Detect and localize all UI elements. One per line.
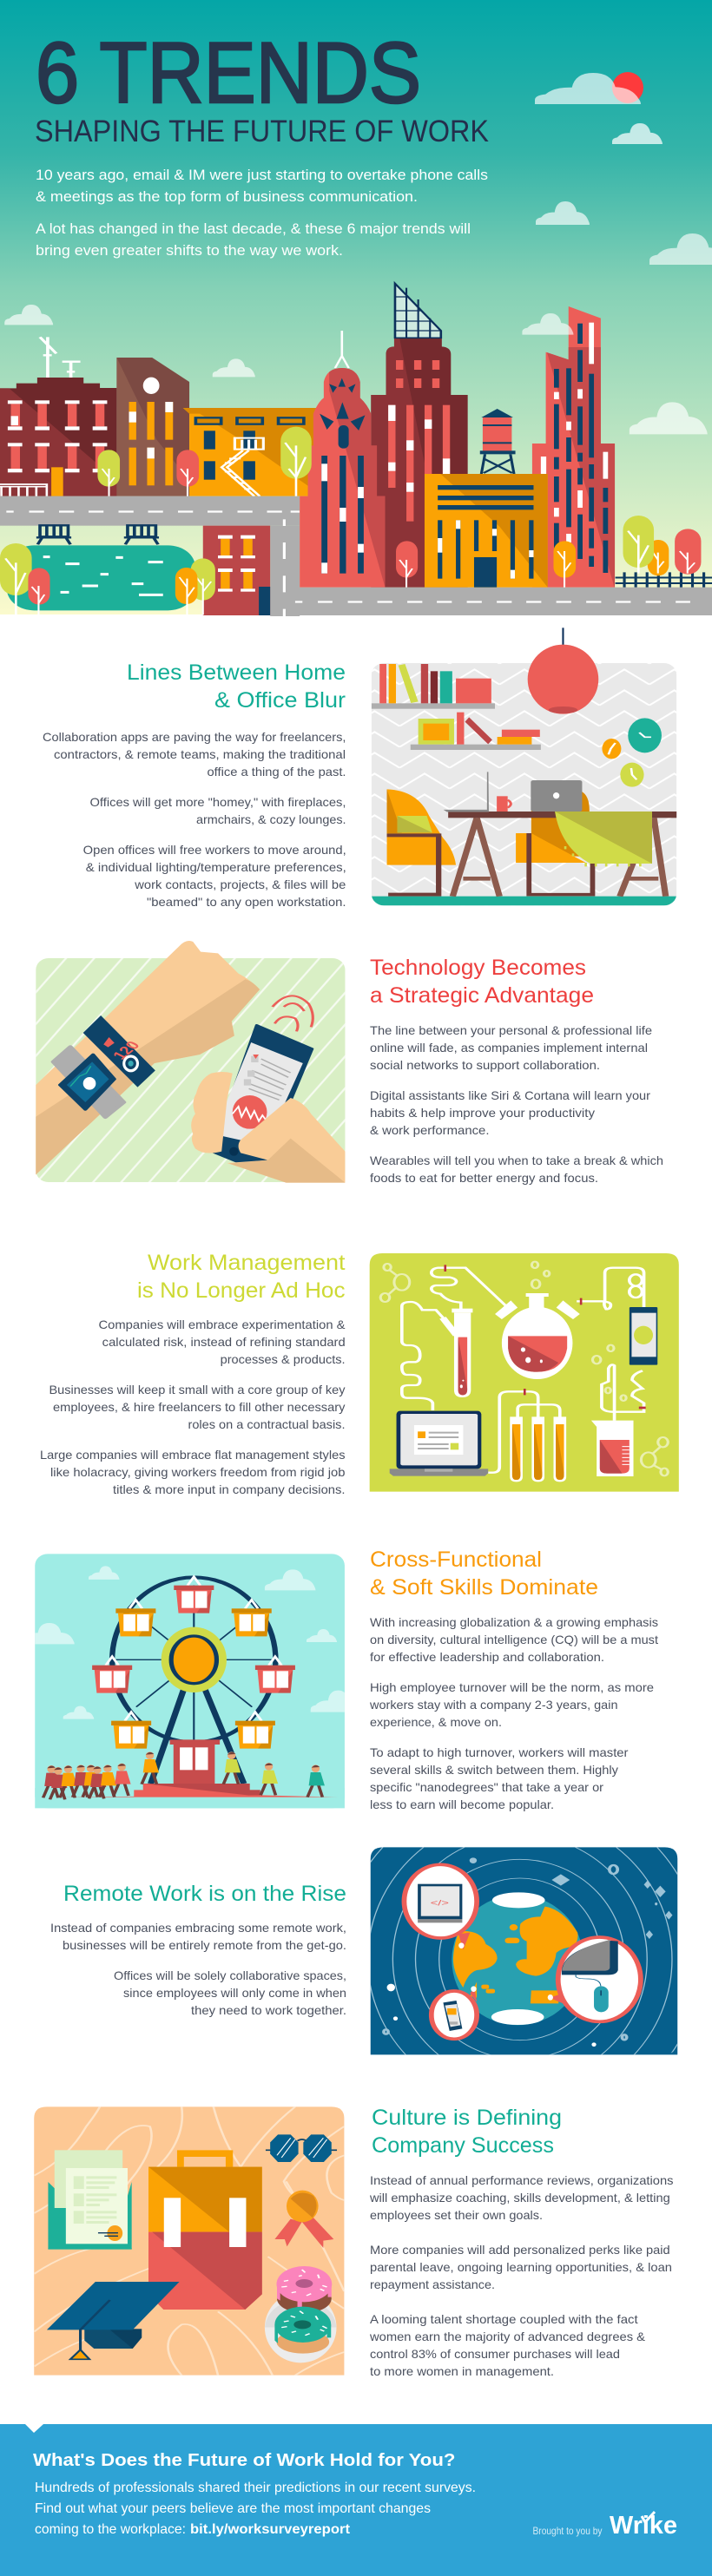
intro text: bring even greater shifts to the way we work. (36, 242, 343, 259)
backpack (177, 2150, 233, 2167)
text: lines between home and office: Collaboration apps are paving the way for freelancers, (43, 730, 346, 744)
heading: work management (137, 1251, 346, 1303)
title: 6 TRENDS (36, 24, 421, 121)
fence (616, 572, 712, 588)
footer text: coming to the workplace: (35, 2522, 186, 2537)
text: cross-functional: High employee turnover will be the norm, as more (370, 1680, 654, 1694)
beaker (591, 1421, 634, 1476)
hub (162, 1627, 227, 1692)
text: lines between home and office: "beamed" to any open workstation. (147, 895, 346, 909)
text: lines between home and office: work contacts, projects, & files will be (134, 877, 346, 891)
text: technology: & work performance. (370, 1123, 490, 1137)
text: remote work: businesses will be entirely remote from the get-go. (63, 1938, 346, 1952)
text: work management: Businesses will keep it small with a core group of key (49, 1383, 346, 1396)
plate and donuts (265, 2292, 337, 2362)
three test tubes (510, 1416, 566, 1482)
text: culture: More companies will add personalized perks like paid (370, 2243, 670, 2257)
text: work management (40, 1318, 346, 1496)
text: culture: will emphasize coaching, skills development, & letting (369, 2191, 670, 2205)
heading: cross-functional: Cross-Functional (370, 1548, 542, 1572)
clouds and red balloon in sky (535, 72, 712, 265)
text: technology: The line between your personal & professional life (370, 1023, 652, 1037)
intro text: & meetings as the top form of business communication. (36, 188, 418, 205)
text: work management: calculated risk, instead of refining standard (102, 1335, 346, 1349)
dark skyscraper (371, 338, 468, 588)
text: technology: habits & help improve your productivity (370, 1106, 595, 1120)
sunglasses (266, 2139, 337, 2150)
text: lines between home and office: office a thing of the past. (207, 765, 346, 779)
left chair (387, 789, 456, 865)
phone (630, 1307, 657, 1365)
arm with wearables (36, 941, 260, 1174)
text: cross-functional: experience, & move on. (370, 1715, 502, 1729)
heading: work management: Work Management (148, 1251, 346, 1275)
heading: work management: is No Longer Ad Hoc (137, 1278, 346, 1303)
text: cross-functional (369, 1615, 658, 1811)
text: technology: social networks to support collaboration. (370, 1058, 600, 1072)
text: technology: online will fade, as companies implement internal (370, 1041, 648, 1055)
tubing (402, 1268, 644, 1473)
award ribbon (274, 2218, 333, 2248)
intro text (36, 167, 488, 259)
text: cross-functional: for effective leadership and collaboration. (370, 1650, 604, 1664)
text: technology: Wearables will tell you when to take a break & which (370, 1153, 663, 1167)
subtitle: SHAPING THE FUTURE OF WORK (35, 115, 489, 148)
footer text: Hundreds of professionals shared their predictions in our recent surveys. (35, 2481, 476, 2495)
illustration: laboratory (370, 1253, 679, 1492)
text: culture: employees set their own goals. (370, 2208, 543, 2222)
illustration: wearables and phone: 120 (109, 1039, 144, 1062)
laptop (397, 1411, 481, 1469)
text: lines between home and office: Offices will get more "homey," with fireplaces, (90, 795, 346, 809)
trees (191, 558, 215, 601)
callout bubble: laptop (404, 1864, 477, 1938)
text: work management: Large companies will embrace flat management styles (40, 1448, 346, 1462)
text: work management: roles on a contractual basis. (188, 1417, 346, 1431)
text: work management: Companies will embrace experimentation & (99, 1318, 346, 1331)
gondolas (174, 1577, 214, 1613)
heading: cross-functional: & Soft Skills Dominate (370, 1575, 598, 1600)
text: lines between home and office (43, 730, 346, 909)
illustration: ferris wheel (18, 1554, 360, 1808)
stars (470, 1857, 673, 1939)
footer text: bit.ly/worksurveyreport (190, 2522, 351, 2537)
text: culture: Instead of annual performance reviews, organizations (370, 2173, 674, 2187)
callout bubble: monitor and mouse (558, 1937, 641, 2021)
heading: technology: Technology Becomes (370, 956, 586, 980)
text: culture: repayment assistance. (370, 2277, 495, 2291)
illustration: remote work globe: </> (431, 1898, 449, 1908)
text: remote work (50, 1921, 346, 2017)
globe (452, 1895, 583, 2025)
text: lines between home and office: armchairs, & cozy lounges. (196, 812, 346, 826)
footer heading: What's Does the Future of Work Hold for You? (33, 2451, 455, 2470)
footer notch (25, 2424, 43, 2433)
heading: remote work: Remote Work is on the Rise (63, 1882, 346, 1906)
text: cross-functional: on diversity, cultural intelligence (CQ) will be a must (370, 1633, 658, 1646)
intro text: 10 years ago, email & IM were just starting to overtake phone calls (36, 167, 488, 183)
text: lines between home and office: & individual lighting/temperature preferences, (86, 860, 346, 874)
wall clocks (628, 718, 662, 752)
round flask (495, 1300, 580, 1319)
desk (452, 818, 666, 897)
intro text: A lot has changed in the last decade, & these 6 major trends will (36, 220, 471, 237)
orange office building (425, 474, 548, 588)
left test tube (443, 1318, 457, 1335)
text: cross-functional: To adapt to high turnover, workers will master (370, 1745, 629, 1759)
folder with documents (48, 2182, 132, 2249)
text: culture: women earn the majority of advanced degrees & (369, 2330, 646, 2343)
heading: technology (370, 956, 594, 1008)
text: cross-functional: specific "nanodegrees" that take a year or (370, 1780, 603, 1794)
text: culture: parental leave, ongoing learning opportunities, & loan (370, 2260, 672, 2274)
text: work management: like holacracy, giving workers freedom from rigid job (50, 1465, 346, 1479)
text: culture (369, 2173, 674, 2378)
text: lines between home and office: contractors, & remote teams, making the traditional (54, 747, 346, 761)
illustration: wearables and phone (36, 941, 345, 1183)
text: technology: Digital assistants like Siri & Cortana will learn your (370, 1088, 650, 1102)
text: cross-functional: less to earn will become popular. (370, 1797, 554, 1811)
heading: cross-functional (370, 1548, 598, 1600)
graduation cap (84, 2329, 142, 2349)
text: technology: foods to eat for better energy and focus. (370, 1171, 598, 1185)
heading: lines between home and office: Lines Between Home (127, 660, 346, 685)
text: culture: A looming talent shortage coupled with the fact (370, 2312, 638, 2326)
heading: lines between home and office: & Office Blur (214, 688, 346, 713)
illustration: company culture (34, 2106, 344, 2376)
molecules (380, 1262, 668, 1475)
heading: culture: Company Success (372, 2133, 554, 2158)
base platform (134, 1784, 260, 1797)
text: cross-functional: With increasing globalization & a growing emphasis (370, 1615, 658, 1629)
text: cross-functional: several skills & switch between them. Highly (370, 1763, 618, 1777)
heading: culture: Culture is Defining (372, 2106, 562, 2130)
text: lines between home and office: Open offices will free workers to move around, (83, 843, 346, 857)
wireless signal arcs (273, 996, 313, 1031)
people (142, 1751, 159, 1784)
text: work management: employees, & hire freelancers to fill other necessary (53, 1400, 345, 1414)
heading: lines between home and office (127, 660, 346, 713)
Wrike logo: Wrike (610, 2512, 677, 2540)
text: remote work: Offices will be solely collaborative spaces, (114, 1968, 346, 1982)
right chair (531, 792, 590, 857)
water tower (481, 454, 514, 474)
callout bubble: smartphone (432, 1991, 477, 2039)
illustration: remote work globe (370, 1847, 677, 2055)
illustration: city skyline (0, 284, 712, 616)
right coral tower (532, 306, 615, 588)
coral art-deco tower (335, 331, 349, 368)
text: culture: to more women in management. (370, 2364, 554, 2378)
text: culture: control 83% of consumer purchases will lead (370, 2347, 620, 2361)
text: work management: processes & products. (221, 1352, 346, 1366)
credit text: Brought to you by (533, 2525, 603, 2537)
text: cross-functional: workers stay with a company 2-3 years, gain (369, 1698, 618, 1712)
text: remote work: Instead of companies embracing some remote work, (50, 1921, 346, 1935)
phone in hand (211, 1025, 313, 1172)
illustration: home office (372, 628, 676, 905)
text: technology (370, 1023, 663, 1185)
text: remote work: they need to work together. (191, 2003, 346, 2017)
text: work management: titles & more input in company decisions. (113, 1482, 346, 1496)
blanket (555, 812, 652, 864)
heading: technology: a Strategic Advantage (370, 983, 594, 1008)
pendant lamp (562, 628, 564, 645)
heading: culture (372, 2106, 562, 2158)
wheel rim and spokes (112, 1577, 275, 1742)
footer text (35, 2481, 476, 2537)
laptops and mug (531, 780, 582, 812)
text: remote work: since employees will only come in when (123, 1986, 346, 2000)
footer text: Find out what your peers believe are the most important changes (35, 2501, 431, 2516)
footer band (0, 2424, 712, 2576)
header sky background (0, 0, 712, 614)
